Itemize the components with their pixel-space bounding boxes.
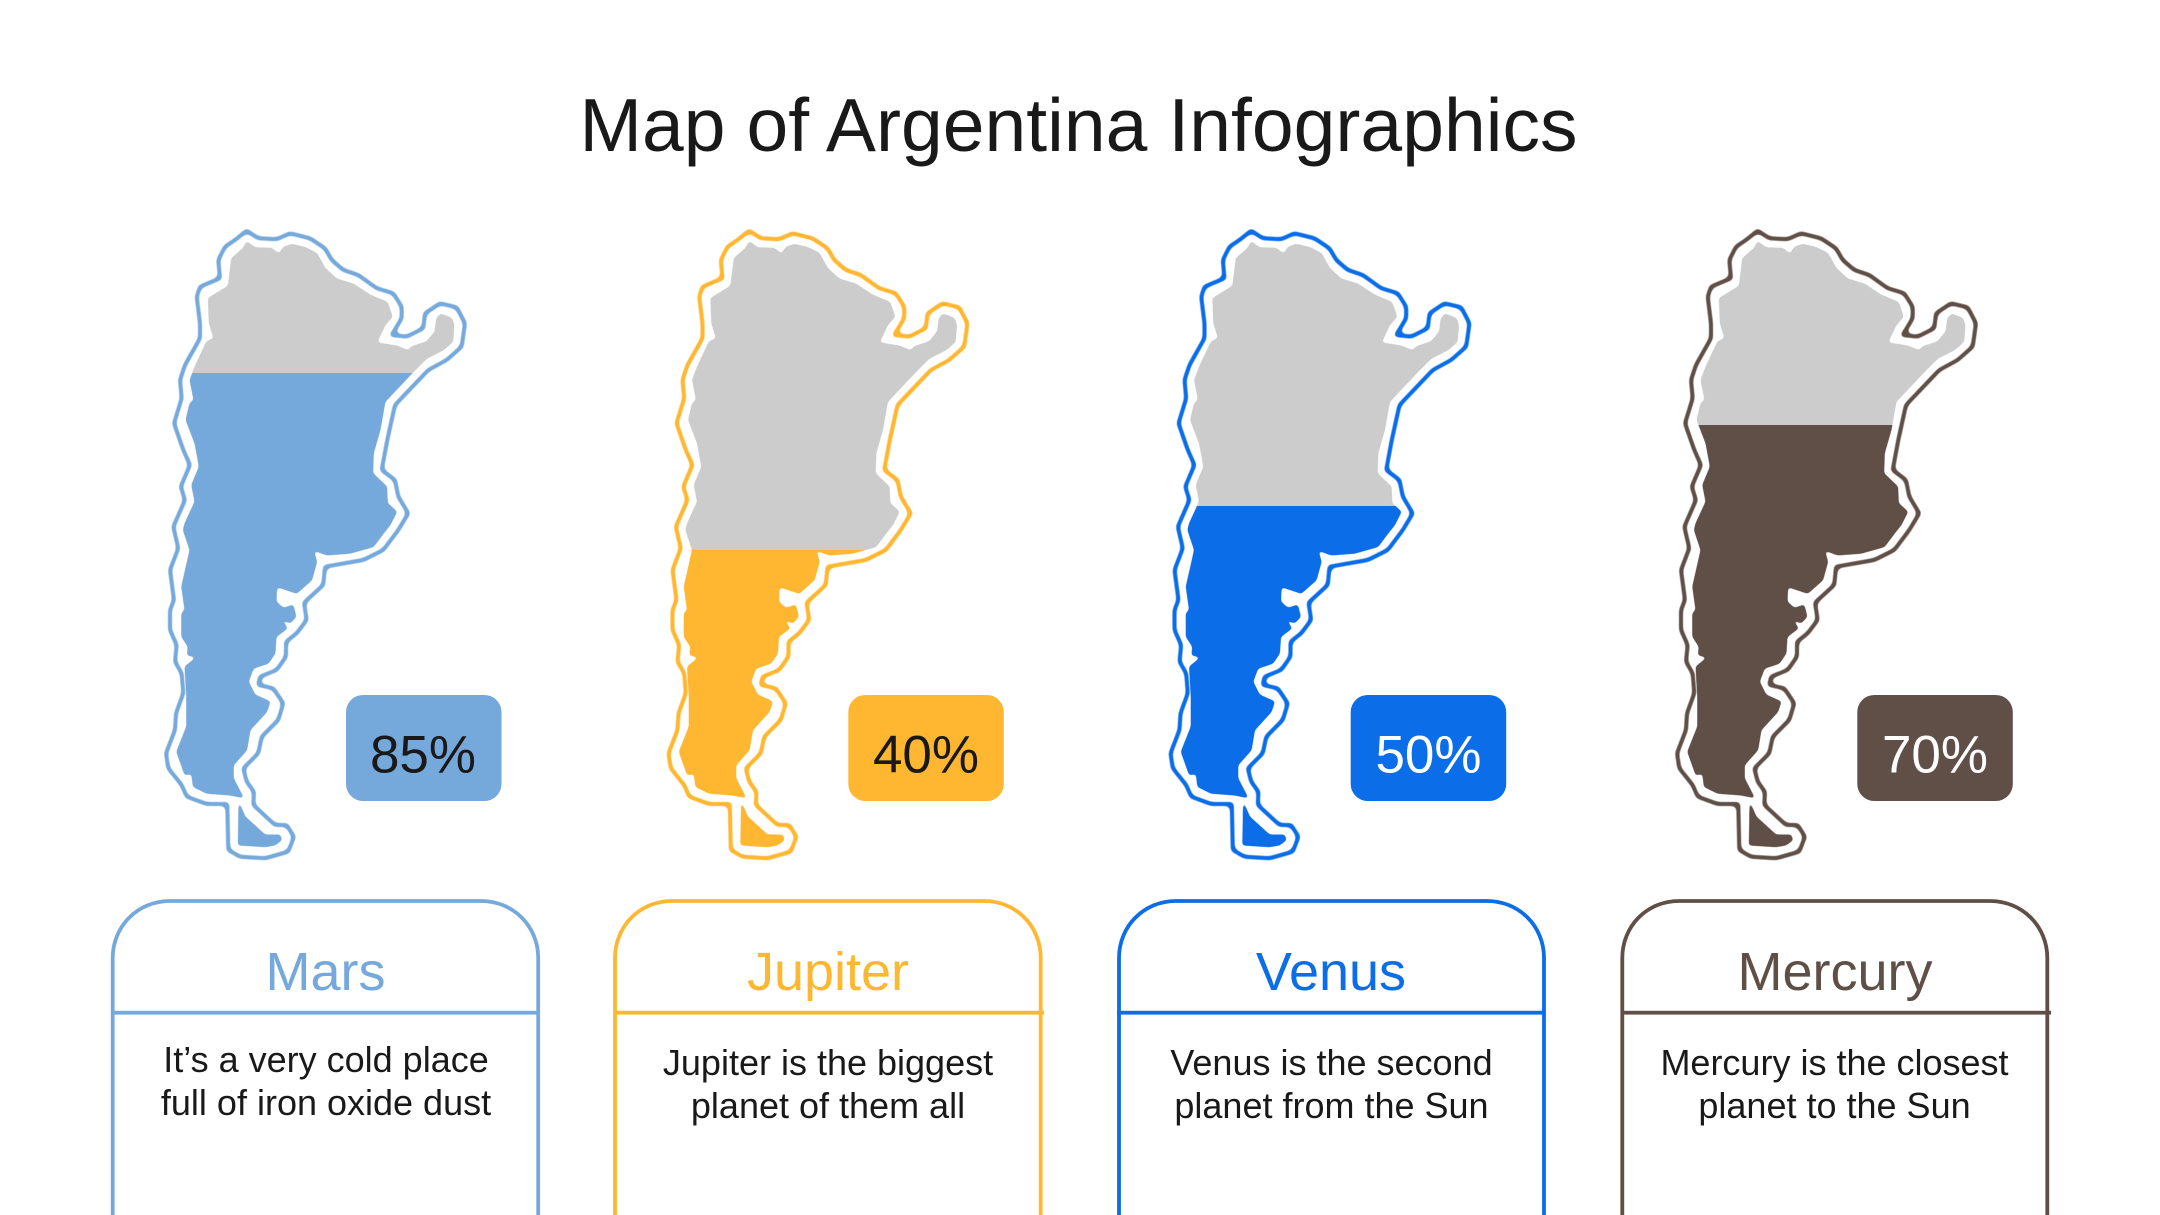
card: Mercury: planet to the Sun [1698, 1085, 1971, 1126]
card: Mars: Mars [266, 942, 386, 1002]
map: Mercury 70% [1677, 231, 1976, 858]
card: Mars: full of iron oxide dust [161, 1082, 491, 1123]
map: Mars 85% [166, 231, 465, 858]
title: Map of Argentina Infographics [580, 83, 1578, 167]
card: Mercury: Mercury [1737, 942, 1933, 1002]
badge: 70%: 70% [1882, 726, 1988, 784]
panel: Jupiter [615, 231, 1044, 1215]
card: Venus: planet from the Sun [1174, 1085, 1489, 1126]
card: Venus: Venus [1256, 942, 1406, 1002]
panel: Mars [113, 231, 540, 1215]
panel: Mercury [1622, 231, 2051, 1215]
badge: 50% [1351, 695, 1506, 801]
map: Jupiter 40% [668, 231, 968, 858]
card: Mercury: Mercury is the closest [1660, 1042, 2009, 1083]
card: Jupiter [615, 901, 1044, 1215]
card: Jupiter: Jupiter [747, 942, 909, 1002]
map: Venus 50% [1170, 231, 1470, 858]
badge: 50%: 50% [1375, 726, 1482, 784]
badge: 70% [1857, 695, 2013, 801]
panel: Venus [1117, 231, 1544, 1215]
badge: 85%: 85% [370, 726, 476, 784]
card: Mars: It’s a very cold place [163, 1039, 489, 1080]
card: Jupiter: planet of them all [691, 1085, 965, 1126]
card: Mercury [1622, 901, 2051, 1215]
badge: 40%: 40% [873, 726, 979, 784]
badge: 40% [848, 695, 1004, 801]
card: Jupiter: Jupiter is the biggest [663, 1042, 993, 1083]
card: Venus: Venus is the second [1170, 1042, 1493, 1083]
card: Mars [113, 901, 540, 1215]
card: Venus [1117, 901, 1544, 1215]
badge: 85% [346, 695, 502, 801]
